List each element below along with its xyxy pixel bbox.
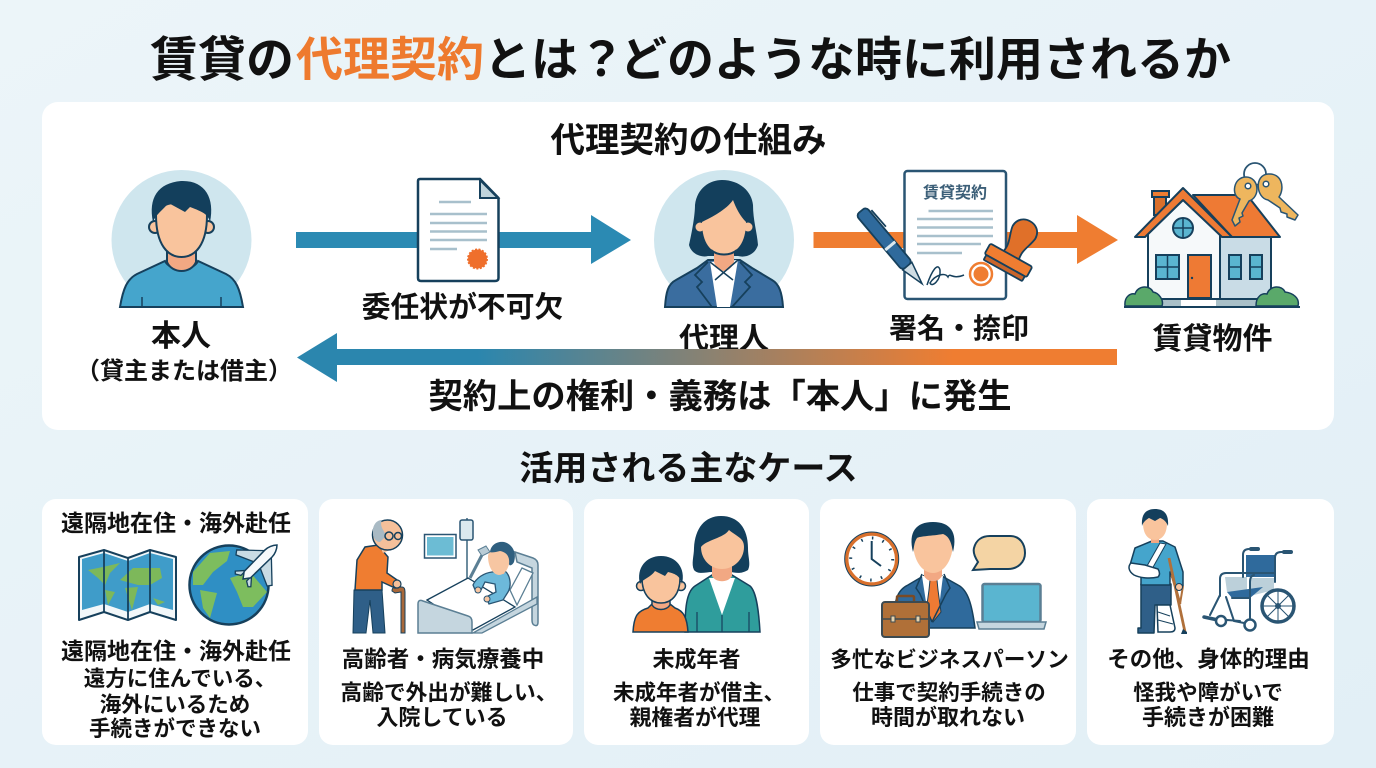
key message: 契約上の権利・義務は「本人」に発生: [428, 378, 1012, 416]
label: principal: [76, 320, 292, 385]
card heading: その他、身体的理由: [1107, 647, 1310, 672]
card heading: 遠隔地在住・海外赴任: [61, 638, 291, 664]
card description: [84, 667, 276, 741]
icon: injured person with crutch: [1129, 509, 1187, 634]
arrow: signing to property: [814, 215, 1118, 264]
card description: 手続きが困難: [1142, 705, 1274, 730]
card description: 高齢で外出が難しい、: [341, 680, 557, 705]
panel heading: 代理契約の仕組み: [550, 122, 826, 160]
label: principal: （貸主または借主）: [76, 358, 292, 385]
title: どのような時に利用されるか: [620, 33, 1231, 86]
icon: globe and airplane: [190, 527, 295, 624]
card: remote residence or overseas posting: [42, 499, 308, 745]
panel: mechanism of proxy contract: [42, 102, 1334, 430]
card description: [341, 680, 557, 730]
icon: wheelchair: [1204, 549, 1294, 630]
document title: 賃貸契約: [923, 183, 987, 202]
card: minors: [584, 499, 809, 745]
card description: 入院している: [376, 705, 508, 730]
card heading: 未成年者: [652, 647, 741, 672]
card description: 未成年者が借主、: [613, 680, 785, 705]
arrow: power of attorney to agent: [296, 215, 631, 264]
card description: 仕事で契約手続きの: [852, 681, 1046, 705]
icon: power of attorney document: [418, 179, 498, 281]
icon: laptop: [977, 584, 1046, 629]
card description: 手続きができない: [89, 716, 261, 741]
title: とは？: [484, 33, 625, 86]
card description: [852, 681, 1046, 730]
label: agent: 代理人: [679, 323, 769, 356]
arrow: rights and obligations back to principal: [297, 333, 1117, 382]
icon: lease contract with pen and stamp: [856, 171, 1051, 299]
label: signature and seal: 署名・捺印: [889, 313, 1029, 344]
icon: clock: [845, 532, 899, 586]
icon: agent person: [650, 170, 798, 312]
icon: business person: [893, 522, 975, 628]
card: busy business person: [820, 499, 1076, 745]
icon: speech bubble: [973, 536, 1025, 570]
icon: parent and child: [633, 516, 760, 632]
card description: 怪我や障がいで: [1133, 680, 1283, 705]
card top heading: 遠隔地在住・海外赴任: [61, 510, 291, 536]
icon: principal person: [110, 170, 255, 312]
section heading: main use cases: 活用される主なケース: [519, 450, 858, 488]
label: principal: 本人: [151, 320, 211, 353]
icon: elderly person with cane: [353, 520, 405, 633]
title: 代理契約: [296, 33, 484, 86]
card heading: 多忙なビジネスパーソン: [830, 647, 1069, 672]
icon: rental house with keys: [1124, 163, 1300, 307]
icon: monitor: [424, 534, 456, 558]
label: rental property: 賃貸物件: [1152, 323, 1272, 356]
card: other physical reasons: [1087, 499, 1334, 745]
icon: briefcase: [882, 596, 929, 637]
icon: folded map: [79, 550, 176, 620]
card description: [1133, 680, 1283, 730]
card description: 遠方に住んでいる、: [84, 667, 276, 691]
icon: hospital bed with patient: [418, 518, 538, 633]
card description: 海外にいるため: [100, 693, 250, 717]
card heading: 高齢者・病気療養中: [342, 647, 544, 672]
label: power of attorney required: 委任状が不可欠: [362, 291, 563, 324]
card description: [613, 680, 785, 730]
title: 賃貸の: [150, 34, 294, 87]
card description: 親権者が代理: [630, 705, 761, 730]
card description: 時間が取れない: [871, 705, 1025, 730]
card: elderly or under medical care: [319, 499, 573, 745]
